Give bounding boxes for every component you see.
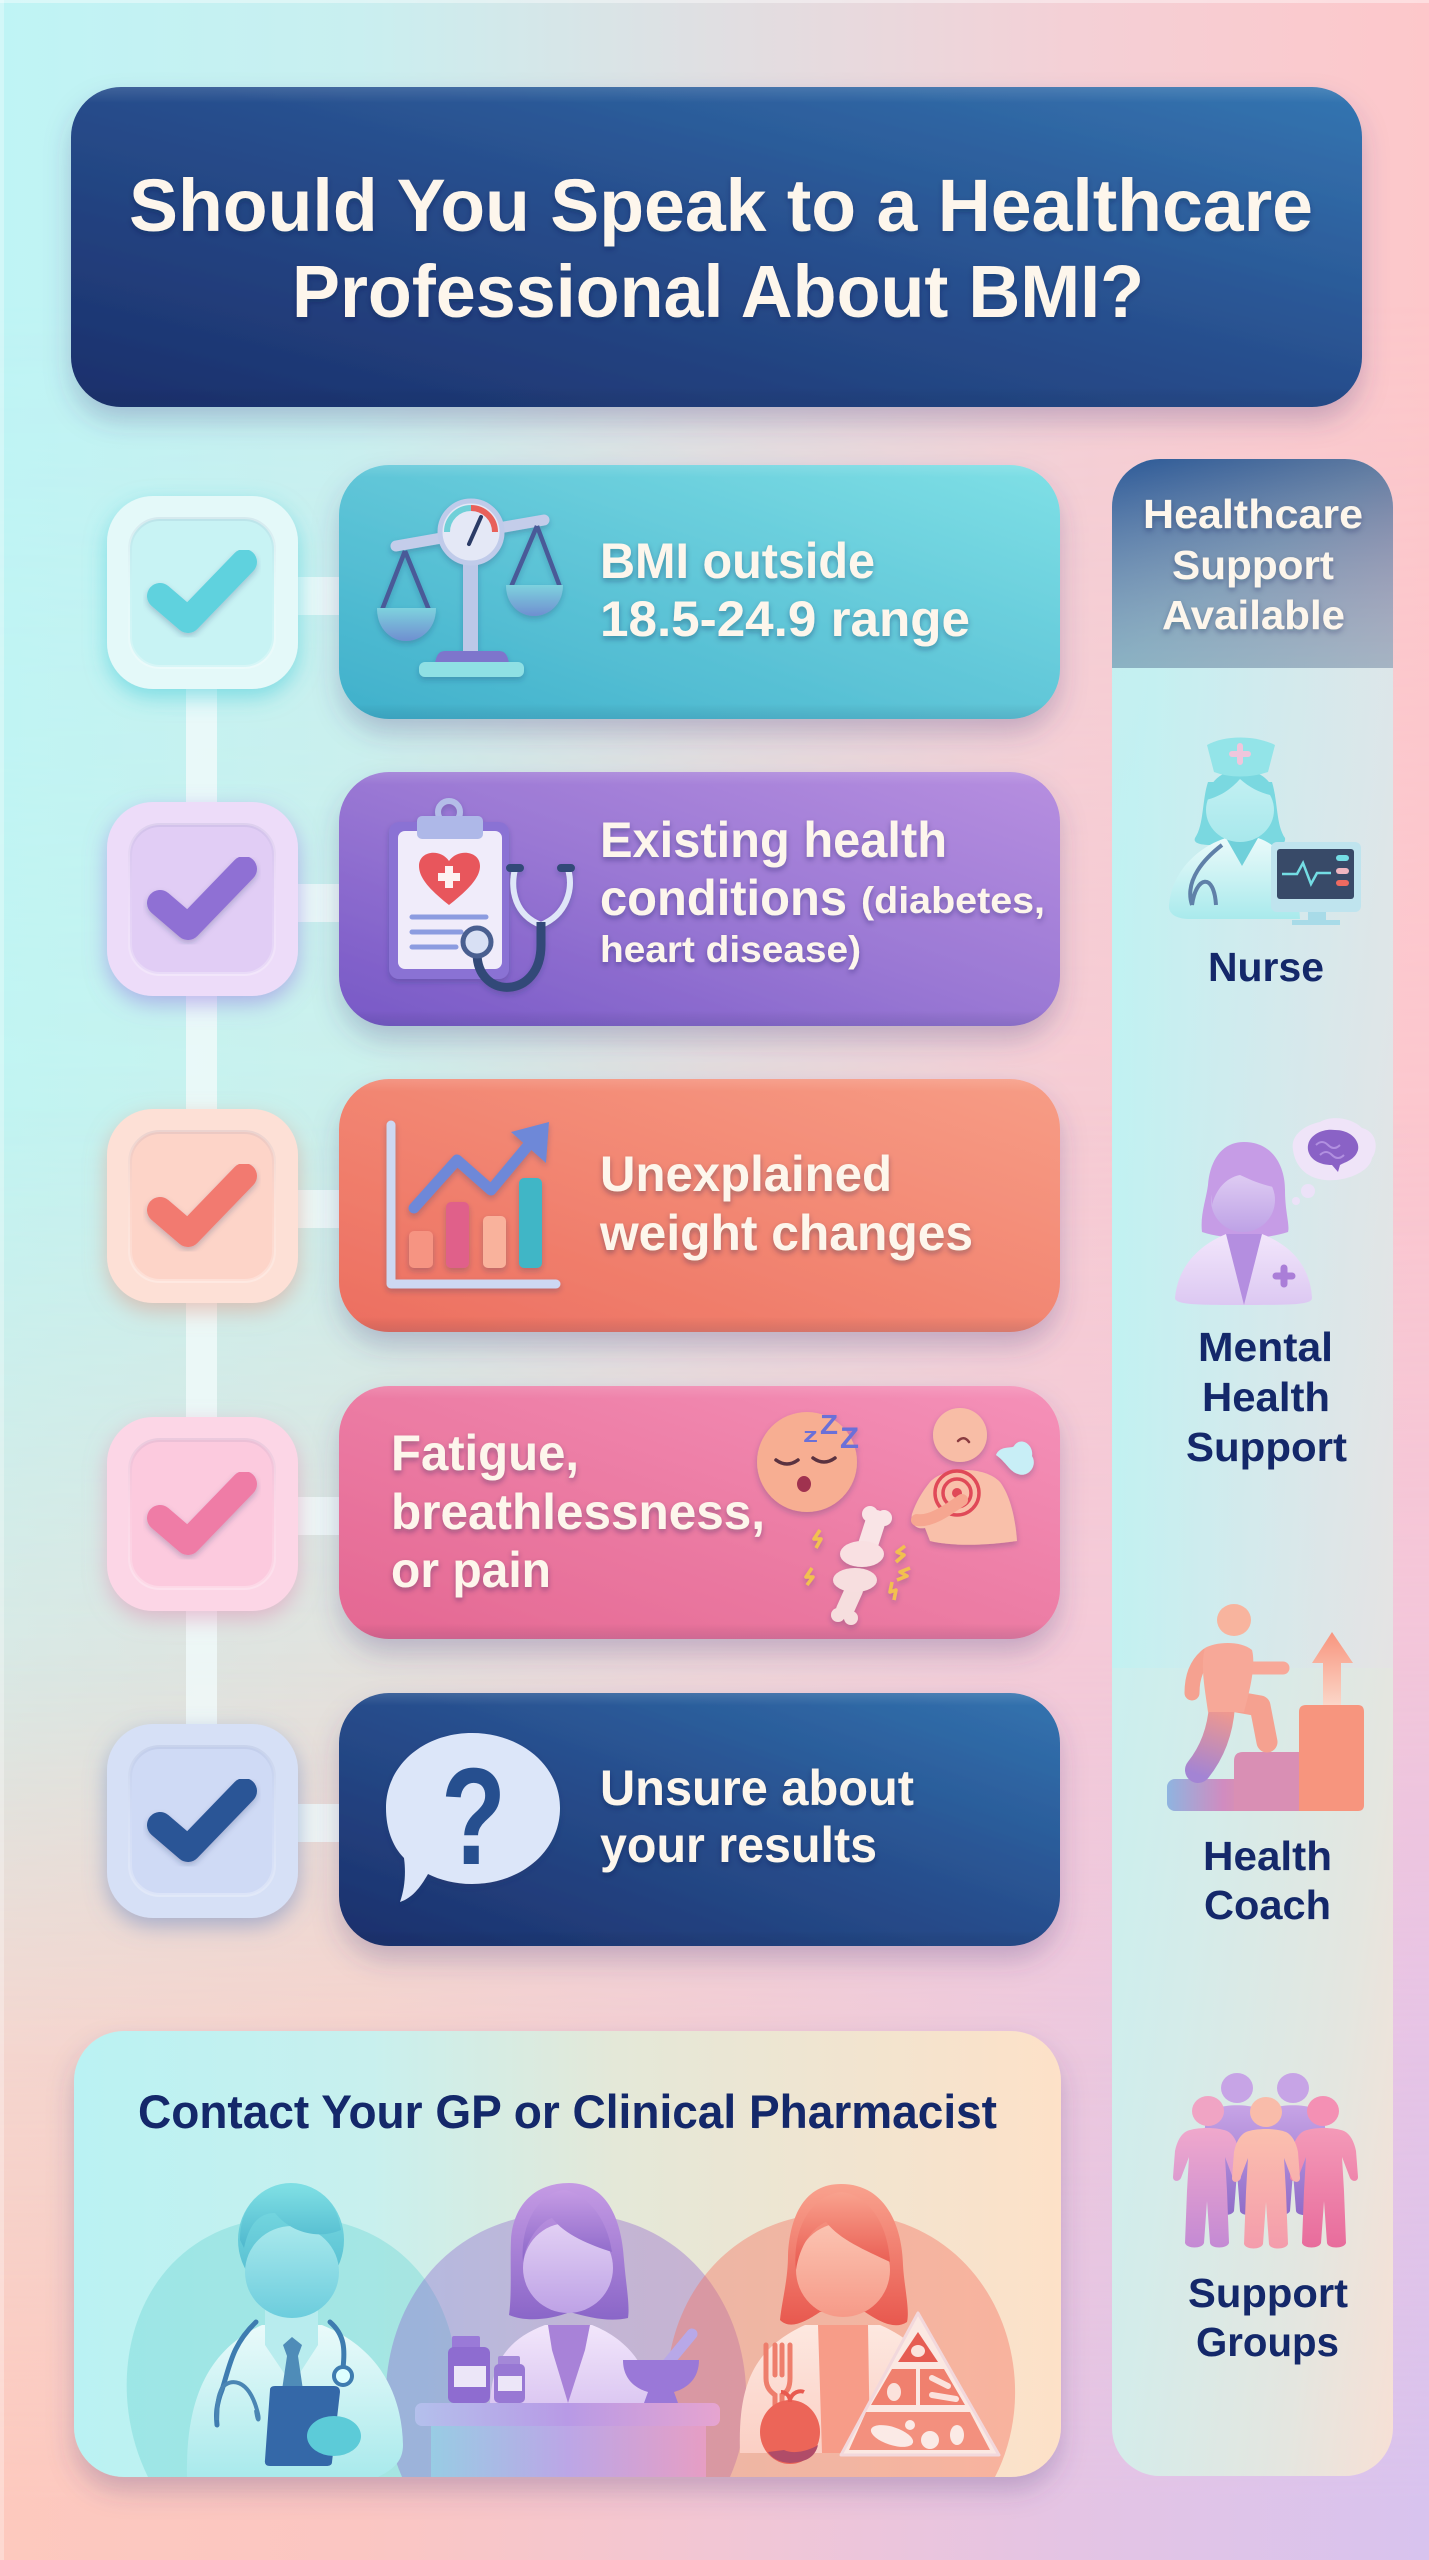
heading: contact: Contact Your GP or Clinical Pharmacist [138,2085,997,2138]
label: mental health support: Support [1186,1424,1347,1470]
card 3: unexplained weight changes: weight changes [599,1205,973,1261]
title banner: Should You Speak to a Healthcare [129,164,1313,247]
label: health coach: Health [1203,1833,1332,1879]
icon: painful joint [806,1506,910,1625]
icon: sleepy face: z [803,1425,818,1447]
icon: question speech bubble [386,1733,560,1902]
card 5: unsure about your results: your results [600,1817,877,1873]
label: mental health support: Health [1202,1374,1330,1420]
card 2: existing health conditions: Existing health [600,812,947,868]
icon: sleepy face: Z [820,1409,838,1440]
card 1: BMI outside range: BMI outside [600,533,875,589]
icon: nurse [1169,738,1361,925]
card 5: unsure about your results: Unsure about [600,1760,914,1816]
icon: balance scale [377,501,563,677]
checkbox 4 [107,1417,298,1611]
panel: healthcare support available [1112,459,1393,2476]
title banner [71,87,1362,407]
icon: question speech bubble: ? [441,1740,506,1894]
checkbox 1 [107,496,298,689]
figure: pharmacist [415,2183,720,2477]
card 1: BMI outside range [339,465,1060,719]
card 2: existing health conditions: (diabetes, [861,880,1045,921]
title banner: Professional About BMI? [292,250,1144,333]
icon: sleepy face [757,1409,859,1512]
icon: breathless person [912,1408,1034,1545]
icon: mental health support [1175,1118,1376,1305]
icon: bar chart with rising arrow [391,1122,556,1284]
label: health coach: Coach [1204,1882,1331,1928]
illustration: three clinicians [127,2183,1015,2477]
label: health coach [1203,1833,1332,1928]
figure: doctor [187,2183,403,2477]
checkbox 5 [107,1724,298,1918]
card 4: fatigue, breathlessness, pain: or pain [391,1542,551,1598]
card 4: fatigue, breathlessness, pain: Fatigue, [391,1425,579,1481]
timeline connectors [186,577,341,1842]
label: mental health support [1186,1324,1347,1470]
icon: health coach [1167,1604,1364,1811]
card 2: existing health conditions: conditions [600,870,847,926]
card 4: fatigue, breathlessness, pain [339,1386,1060,1639]
label: support groups: Groups [1196,2319,1339,2365]
label: support groups: Support [1188,2270,1348,2316]
icon: clipboard with stethoscope [389,801,571,987]
label: support groups [1188,2270,1348,2365]
panel: healthcare support available: Available [1162,592,1345,638]
card 5: unsure about your results [339,1693,1060,1946]
panel: healthcare support available: Healthcare [1143,491,1363,537]
card 1: BMI outside range: 18.5-24.9 range [600,591,970,647]
card 2: existing health conditions [339,772,1060,1026]
icon: support groups [1173,2073,1358,2248]
panel: healthcare support available: Support [1172,542,1334,588]
card 3: unexplained weight changes: Unexplained [600,1146,892,1202]
checkbox 2 [107,802,298,996]
icon: sleepy face: Z [840,1422,859,1455]
card 2: existing health conditions: heart disease) [600,929,861,970]
card 3: unexplained weight changes [339,1079,1060,1332]
label: mental health support: Mental [1198,1324,1333,1370]
card 4: fatigue, breathlessness, pain: breathlessness, [391,1484,765,1540]
checkbox 3 [107,1109,298,1303]
label: nurse: Nurse [1208,944,1324,990]
panel: contact your GP or clinical pharmacist [74,2031,1061,2477]
figure: dietitian [740,2184,999,2464]
panel header [1112,459,1393,668]
